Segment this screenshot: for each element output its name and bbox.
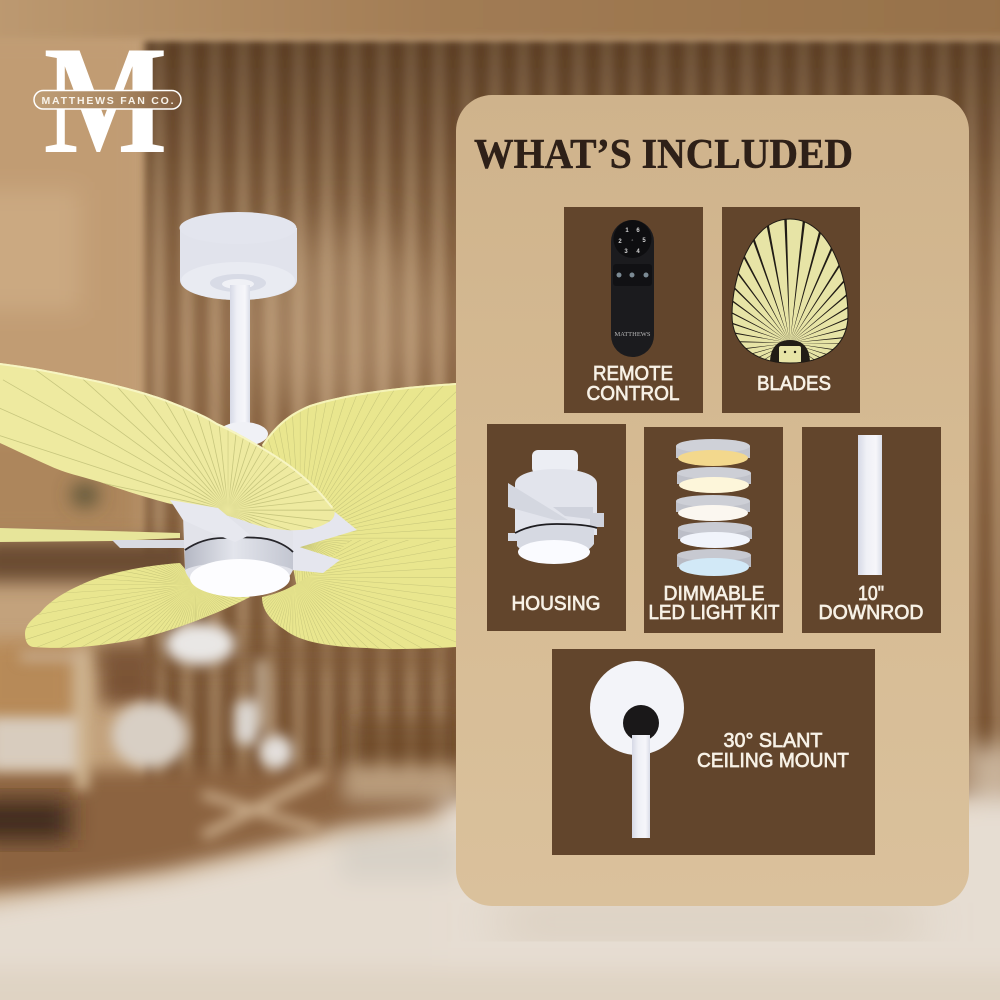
icon: remote: 4: [636, 249, 640, 255]
icon: remote: 3: [624, 249, 628, 255]
label: CEILING MOUNT: [697, 750, 849, 772]
motor housing: [183, 515, 293, 597]
card: 10 inch downrod: [802, 427, 941, 633]
label: HOUSING: [512, 593, 600, 615]
card: blades: [722, 207, 860, 413]
icon: five LED colour discs: [676, 439, 752, 576]
label: DOWNROD: [818, 602, 924, 624]
left blade, edge-on: [0, 528, 180, 542]
downrod collar: [218, 422, 268, 446]
label: [818, 583, 924, 624]
icon: remote: ◦: [631, 238, 634, 244]
card: housing: [487, 424, 626, 631]
icon: remote: 1: [625, 228, 629, 234]
fan canopy: [180, 212, 297, 300]
card: remote control: [564, 207, 703, 413]
top left blade: [0, 363, 335, 530]
label: [648, 583, 780, 624]
downrod: [230, 285, 250, 430]
left blade bracket: [112, 540, 186, 548]
label: 10": [858, 583, 884, 605]
lower right blade: [262, 540, 456, 650]
lower left blade: [25, 563, 250, 648]
right blade: [262, 383, 456, 584]
logo: Matthews Fan Co.: M: [44, 14, 168, 186]
blade bracket top left: [170, 500, 250, 542]
card: dimmable LED light kit: [644, 427, 783, 633]
icon: downrod: [858, 435, 882, 575]
card: 30 degree slant ceiling mount: [552, 649, 875, 855]
label: CONTROL: [586, 383, 680, 405]
ceiling fan: [0, 212, 460, 688]
icon: remote: 6: [636, 228, 640, 234]
panel: what's included: [456, 95, 969, 906]
icon: housing: [508, 450, 604, 564]
label: BLADES: [757, 373, 831, 395]
title: WHAT’S INCLUDED: [474, 132, 853, 178]
label: REMOTE: [593, 363, 673, 385]
label: [586, 363, 680, 405]
label: [697, 730, 849, 772]
right blade brackets: [270, 512, 357, 573]
icon: remote: MATTHEWS: [614, 331, 651, 338]
label: DIMMABLE: [664, 583, 764, 605]
icon: ceiling mount: [590, 661, 684, 838]
icon: palm blade: [732, 218, 848, 364]
logo: Matthews Fan Co.: MATTHEWS FAN CO.: [42, 95, 174, 107]
icon: remote: 5: [642, 238, 646, 244]
label: LED LIGHT KIT: [648, 602, 780, 624]
label: 30° SLANT: [724, 730, 822, 752]
icon: remote: [611, 220, 654, 357]
icon: remote: 2: [618, 239, 622, 245]
